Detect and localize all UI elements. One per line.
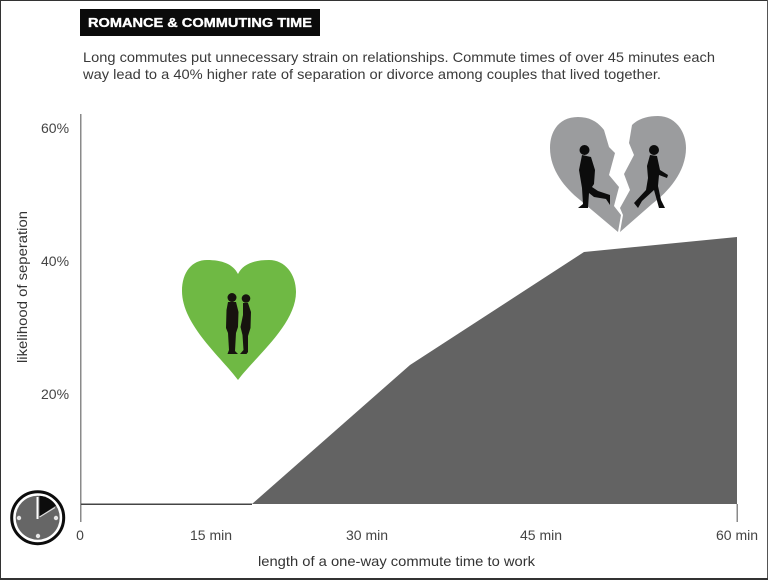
couple silhouette: [226, 293, 251, 354]
icon: green heart with couple: [182, 260, 296, 380]
x axis title: length of a one-way commute time to work: [258, 553, 536, 569]
y axis labels: 20%: [41, 386, 69, 402]
x axis labels: [76, 527, 758, 543]
y axis title: likelihood of seperation: [15, 211, 30, 363]
y axis labels: [41, 120, 69, 402]
x axis labels: 45 min: [520, 527, 562, 543]
woman walking away silhouette: [634, 145, 668, 208]
x axis labels: 30 min: [346, 527, 388, 543]
x axis labels: 60 min: [716, 527, 758, 543]
y axis labels: 60%: [41, 120, 69, 136]
intro text: way lead to a 40% higher rate of separation or divorce among couples that lived together.: [82, 66, 661, 82]
man walking away silhouette: [578, 145, 610, 208]
title: ROMANCE & COMMUTING TIME: [88, 15, 312, 30]
title: [80, 9, 320, 36]
icon: clock: [12, 492, 64, 544]
x axis labels: 0: [76, 527, 84, 543]
icon: broken heart with separated couple: [550, 116, 686, 232]
intro text: Long commutes put unnecessary strain on relationships. Commute times of over 45 minutes each: [83, 49, 715, 65]
intro text: [82, 49, 715, 82]
x axis labels: 15 min: [190, 527, 232, 543]
y axis labels: 40%: [41, 253, 69, 269]
area chart: [80, 114, 738, 522]
